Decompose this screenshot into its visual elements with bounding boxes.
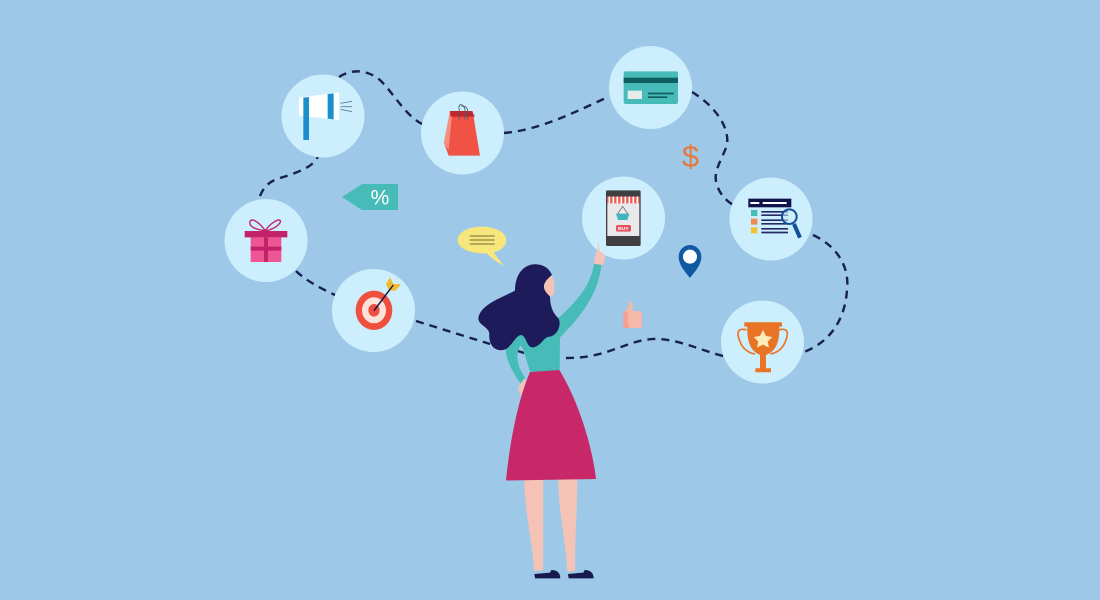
circle: trophy: [721, 300, 804, 384]
dashed journey path: [260, 71, 847, 358]
circle: shopping bag: [421, 92, 504, 174]
legs and shoes: [524, 479, 594, 578]
label: buy: BUY: [618, 226, 629, 232]
circle: credit card: [609, 46, 692, 129]
icon: target with arrow: [356, 277, 401, 330]
raised hand: [594, 241, 605, 265]
tag: percent: [342, 184, 398, 210]
icon: location pin: [679, 245, 701, 278]
circle: search page: [730, 178, 812, 260]
icon: gift box: [245, 220, 287, 262]
icon: dollar sign: $: [682, 139, 699, 174]
icon: speech bubble: [458, 227, 506, 266]
circle: phone shop: [582, 176, 665, 260]
circle: gift: [224, 199, 308, 282]
icon: trophy: [738, 322, 787, 372]
icon: megaphone: [299, 92, 352, 140]
hand on hip: [519, 378, 526, 396]
woman figure: [478, 241, 605, 578]
icon: credit card: [624, 71, 678, 104]
icon: thumbs up: [623, 301, 642, 328]
skirt: [506, 370, 596, 480]
circle: target: [332, 269, 415, 352]
icon: web page with magnifier: [748, 199, 800, 238]
sweater with raised arm: [506, 264, 601, 383]
hair: [478, 264, 560, 350]
circle: megaphone: [282, 74, 364, 158]
icon: shopping bag: [444, 105, 480, 156]
tag: percent: %: [371, 186, 389, 210]
face: [542, 274, 555, 297]
